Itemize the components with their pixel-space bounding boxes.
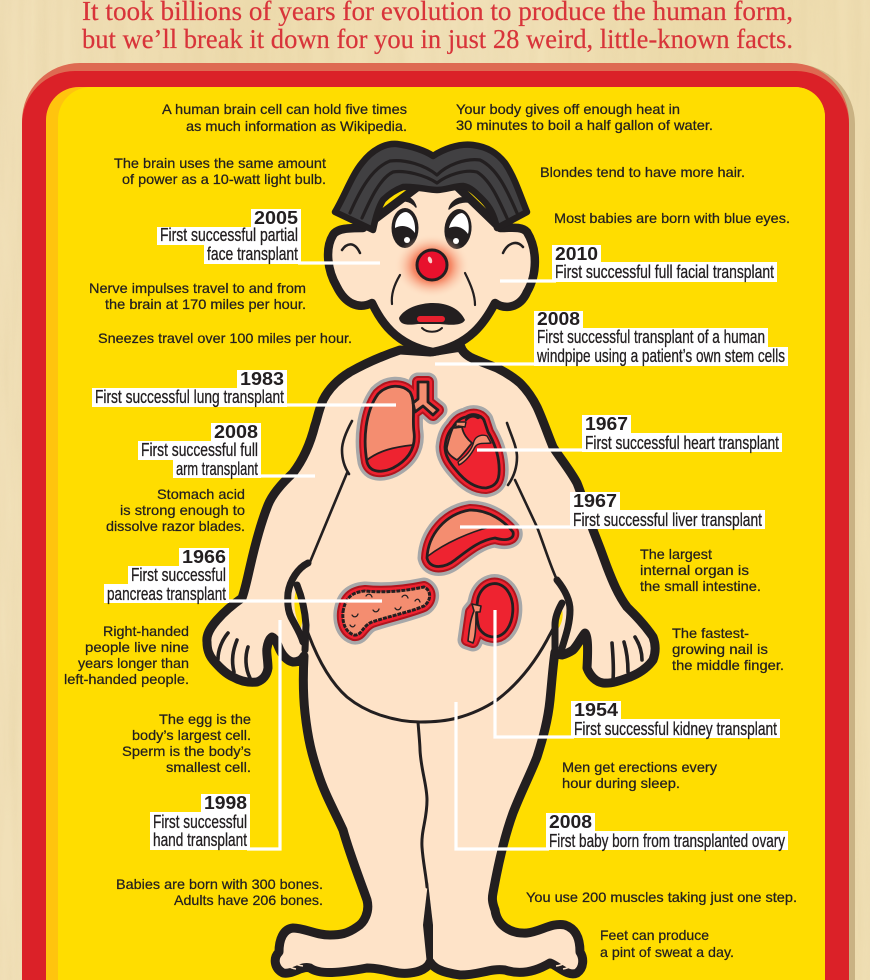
right fingers [612,637,642,680]
transplant labels [92,208,788,851]
label: 2010 facial: First successful full facial transplant [555,262,774,282]
fact: egg and sperm: smallest cell. [166,759,251,775]
left fingers [218,633,250,678]
label: 2008 windpipe: windpipe using a patient’s own stem cells [536,346,785,366]
fact: body heat: Your body gives off enough heat in [456,101,680,117]
label: 1966 pancreas: 1966 [182,547,226,567]
fact: small intestine: The largest [640,546,712,562]
fact: erections: Men get erections every [562,759,717,775]
hair strands [350,160,517,218]
fact: brain power: of power as a 10-watt light bulb. [122,171,326,187]
facts: left column [64,101,407,908]
label: 2008 ovary: 2008 [549,812,592,832]
label: 1954 kidney: First successful kidney transplant [574,719,777,739]
fact: sweat: a pint of sweat a day. [600,944,734,960]
nose glow [394,234,470,298]
fact: muscles: You use 200 muscles taking just one step. [526,889,797,905]
label: 1966 pancreas: First successful [131,565,226,585]
label: 2008 arm: 2008 [214,422,258,442]
label: 2008 windpipe [534,309,788,366]
fact: fastest nail: the middle finger. [672,657,784,673]
label: 1967 heart [582,414,782,453]
fact: sweat [600,927,734,960]
chin [422,328,442,332]
organ: liver [427,510,513,566]
label: 2008 arm: First successful full [141,440,258,460]
fact: bones: Babies are born with 300 bones. [116,876,323,892]
fact: erections: hour during sleep. [562,775,680,791]
label: 1983 lung [92,369,287,407]
fact: nerve impulses [89,280,306,312]
fact: right-handed [64,623,189,687]
fact: small intestine [640,546,761,594]
fact: body heat: 30 minutes to boil a half gallon of water. [456,117,713,133]
label: 2008 ovary [546,812,788,851]
label: 2005 face: face transplant [207,244,298,264]
label: 1966 pancreas: pancreas transplant [107,584,226,604]
mouth [399,303,465,325]
fact: sweat: Feet can produce [600,927,709,943]
fact: egg and sperm: The egg is the [159,711,251,727]
fact: brain power: The brain uses the same amount [114,155,326,171]
label: 1966 pancreas [104,547,229,604]
fact: brain cell [162,101,407,134]
fact: body heat [456,101,713,133]
organ: pancreas [343,587,430,635]
fact: blue eyes: Most babies are born with blue eyes. [554,210,790,226]
fact: fastest nail: The fastest- [672,625,749,641]
eyebrow right [449,198,476,209]
fact: right-handed: Right-handed [103,623,189,639]
label: 1998 hand: 1998 [204,793,247,813]
facts: right column [456,101,797,960]
fact: nerve impulses: Nerve impulses travel to and from [89,280,306,296]
label: 2008 arm [138,422,261,479]
label: 2005 face [157,208,301,264]
fact: sneezes: Sneezes travel over 100 miles per hour. [98,330,352,346]
label: 1998 hand: hand transplant [153,830,247,850]
label: 1983 lung: 1983 [240,369,284,389]
fact: blondes: Blondes tend to have more hair. [540,164,745,180]
fact: stomach acid [106,486,245,534]
label: 2008 ovary: First baby born from transplanted ovary [549,831,785,851]
fact: egg and sperm: body’s largest cell. [132,727,251,743]
fact: stomach acid: Stomach acid [157,486,245,502]
eye right [442,208,474,250]
organ: heart [445,415,499,488]
ear detail left [342,244,360,253]
fact: right-handed: left-handed people. [64,671,189,687]
label: 2005 face: 2005 [254,208,298,228]
fact: stomach acid: dissolve razor blades. [106,518,245,534]
nose [417,250,447,280]
eyebrow left [395,197,416,207]
organ: kidney [467,584,513,643]
label: 1954 kidney: 1954 [574,700,618,720]
head [328,144,535,352]
body silhouette [207,347,655,975]
label: 1967 heart: First successful heart transplant [585,433,779,453]
leader lines [226,263,585,849]
fact: nerve impulses: the brain at 170 miles per hour. [105,296,306,312]
label: 1967 liver: First successful liver transplant [573,510,762,530]
fact: fastest nail [672,625,784,673]
fact: small intestine: internal organ is [640,562,749,578]
fact: bones [116,876,323,908]
fact: right-handed: people live nine [85,639,189,655]
human body figure [207,347,655,975]
label: 1967 liver: 1967 [573,491,617,511]
title [82,0,793,54]
label: 1983 lung: First successful lung transplant [95,387,284,407]
fact: egg and sperm [122,711,251,775]
fact: right-handed: years longer than [78,655,189,671]
fact: stomach acid: is strong enough to [120,502,245,518]
yellow sliver left [294,590,302,628]
fact: egg and sperm: Sperm is the body’s [122,743,251,759]
fact: erections [562,759,717,791]
fact: brain cell: as much information as Wikipedia. [186,118,407,134]
hair [335,144,527,230]
fact: brain power [114,155,326,187]
fact: small intestine: the small intestine. [640,578,761,594]
label: 2010 facial: 2010 [555,244,598,264]
yellow sliver right [557,606,563,629]
cheek lines [392,273,475,305]
fact: brain cell: A human brain cell can hold five times [162,101,407,117]
organ: lung [365,382,438,471]
face shape [328,170,535,352]
label: 2010 facial [552,244,777,282]
label: 1967 heart: 1967 [585,414,628,434]
body contour lines [288,421,570,965]
label: 1998 hand [150,793,250,850]
label: 1998 hand: First successful [153,812,247,832]
label: 2008 windpipe: 2008 [537,309,580,329]
fact: fastest nail: growing nail is [672,641,768,657]
ear detail right [503,243,523,253]
label: 2008 windpipe: First successful transplant of a human [537,327,765,347]
title: but we’ll break it down for you in just 28 weird, little-known facts. [82,24,793,54]
toes [282,953,577,969]
label: 2005 face: First successful partial [160,225,298,245]
fact: bones: Adults have 206 bones. [174,892,323,908]
eye left [392,208,418,248]
label: 1954 kidney [571,700,780,739]
label: 2008 arm: arm transplant [176,459,258,479]
label: 1967 liver [570,491,765,530]
